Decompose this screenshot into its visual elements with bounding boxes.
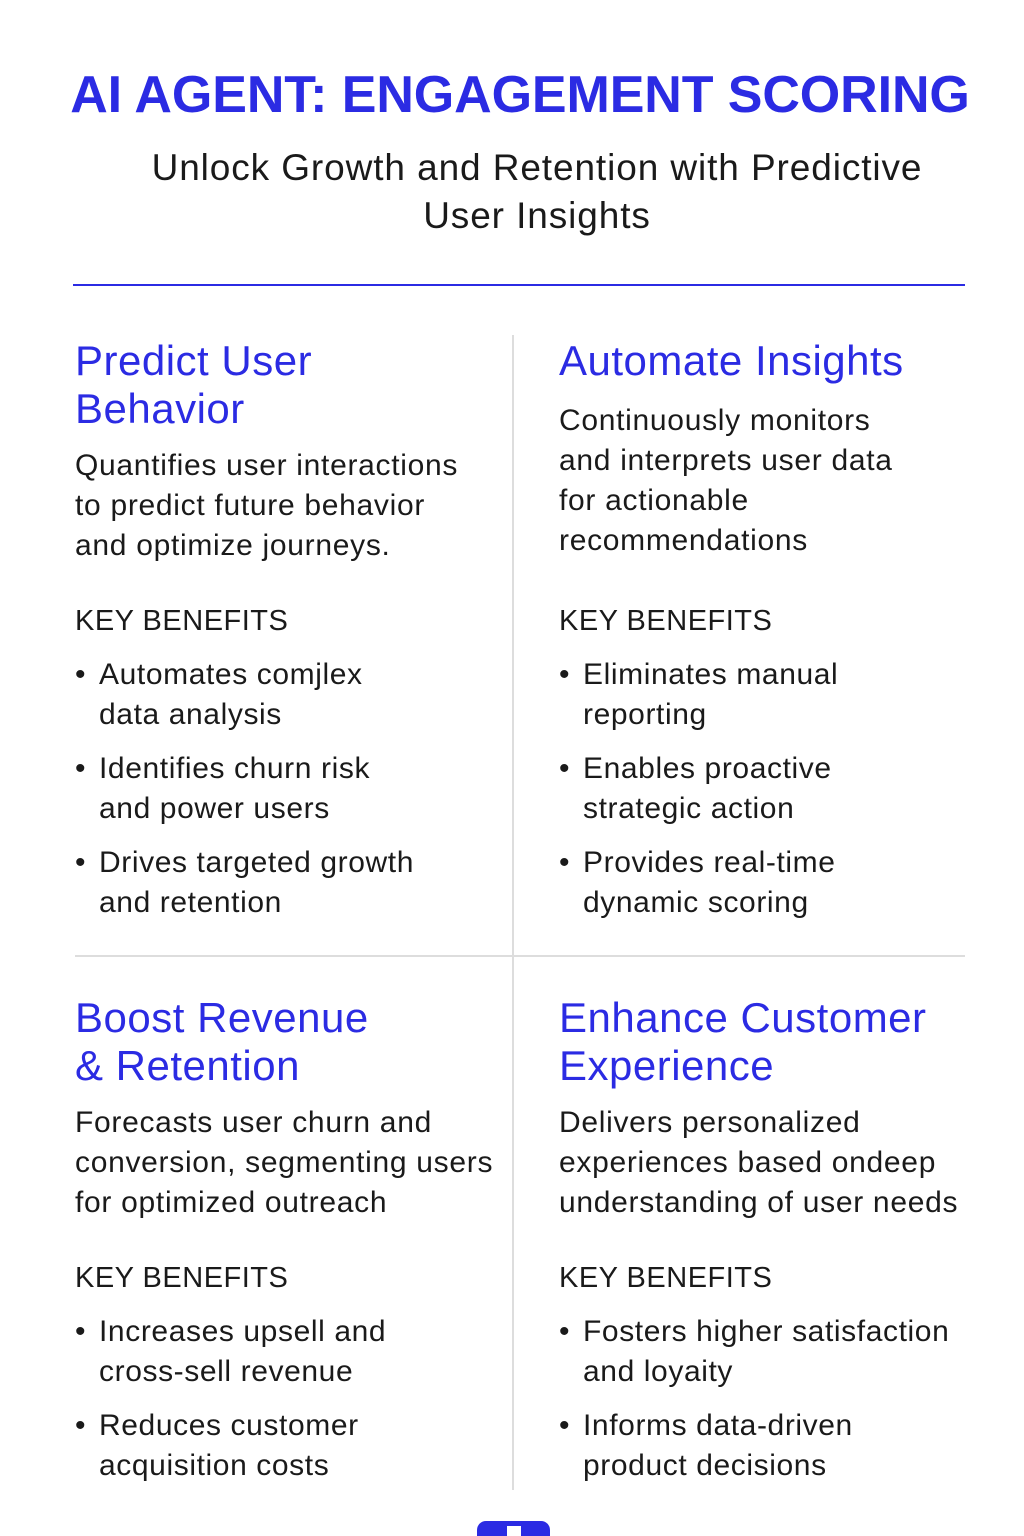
benefit list: Increases upsell and [99, 1315, 386, 1348]
heading [559, 994, 927, 1089]
description: experiences based ondeep [559, 1146, 936, 1179]
benefit list: Automates comjlex [99, 658, 363, 691]
heading: Predict User [75, 337, 312, 384]
subtitle: Unlock Growth and Retention with Predictive [152, 147, 922, 188]
description: and optimize journeys. [75, 529, 391, 562]
description: Quantifies user interactions [75, 449, 458, 482]
description: Forecasts user churn and [75, 1106, 432, 1139]
subtitle [152, 147, 922, 236]
benefit list: Reduces customer [99, 1409, 359, 1442]
benefit list [76, 1315, 386, 1482]
heading: Enhance Customer [559, 994, 927, 1041]
benefit list: cross-sell revenue [99, 1355, 353, 1388]
panel: automate insights [559, 337, 904, 919]
heading: & Retention [75, 1042, 300, 1089]
heading [75, 994, 369, 1089]
benefit list: Provides real-time [583, 846, 836, 879]
key benefits label: KEY BENEFITS [559, 1262, 772, 1294]
benefit list: Identifies churn risk [99, 752, 370, 785]
description: Continuously monitors [559, 404, 871, 437]
icon: bottom button [477, 1521, 550, 1536]
benefit list [76, 658, 414, 919]
heading: Boost Revenue [75, 994, 369, 1041]
description [559, 404, 893, 557]
description: for actionable [559, 484, 749, 517]
benefit list: and power users [99, 792, 330, 825]
description: conversion, segmenting users [75, 1146, 493, 1179]
benefit list: Informs data-driven [583, 1409, 853, 1442]
benefit list: and retention [99, 886, 282, 919]
benefit list [560, 1315, 949, 1482]
description: and interprets user data [559, 444, 893, 477]
benefit list: product decisions [583, 1449, 827, 1482]
benefit list: dynamic scoring [583, 886, 809, 919]
panel: boost revenue [75, 994, 493, 1482]
benefit list [560, 658, 838, 919]
panel: enhance customer experience [559, 994, 958, 1482]
benefit list: Eliminates manual [583, 658, 838, 691]
benefit list: strategic action [583, 792, 794, 825]
description: for optimized outreach [75, 1186, 387, 1219]
description: recommendations [559, 524, 808, 557]
benefit list: Enables proactive [583, 752, 832, 785]
benefit list: acquisition costs [99, 1449, 329, 1482]
benefit list: Drives targeted growth [99, 846, 414, 879]
description: understanding of user needs [559, 1186, 958, 1219]
benefit list: Fosters higher satisfaction [583, 1315, 949, 1348]
key benefits label: KEY BENEFITS [75, 605, 288, 637]
heading: Automate Insights [559, 337, 904, 384]
description: Delivers personalized [559, 1106, 861, 1139]
title: AI AGENT: ENGAGEMENT SCORING [70, 66, 970, 124]
heading: Behavior [75, 385, 245, 432]
heading [75, 337, 312, 432]
description [559, 1106, 958, 1219]
description [75, 1106, 493, 1219]
key benefits label: KEY BENEFITS [75, 1262, 288, 1294]
benefit list: reporting [583, 698, 707, 731]
key benefits label: KEY BENEFITS [559, 605, 772, 637]
benefit list: data analysis [99, 698, 282, 731]
panel: predict user behavior [75, 337, 458, 919]
description [75, 449, 458, 562]
subtitle: User Insights [423, 195, 651, 236]
benefit list: and loyaity [583, 1355, 733, 1388]
description: to predict future behavior [75, 489, 425, 522]
heading: Experience [559, 1042, 774, 1089]
